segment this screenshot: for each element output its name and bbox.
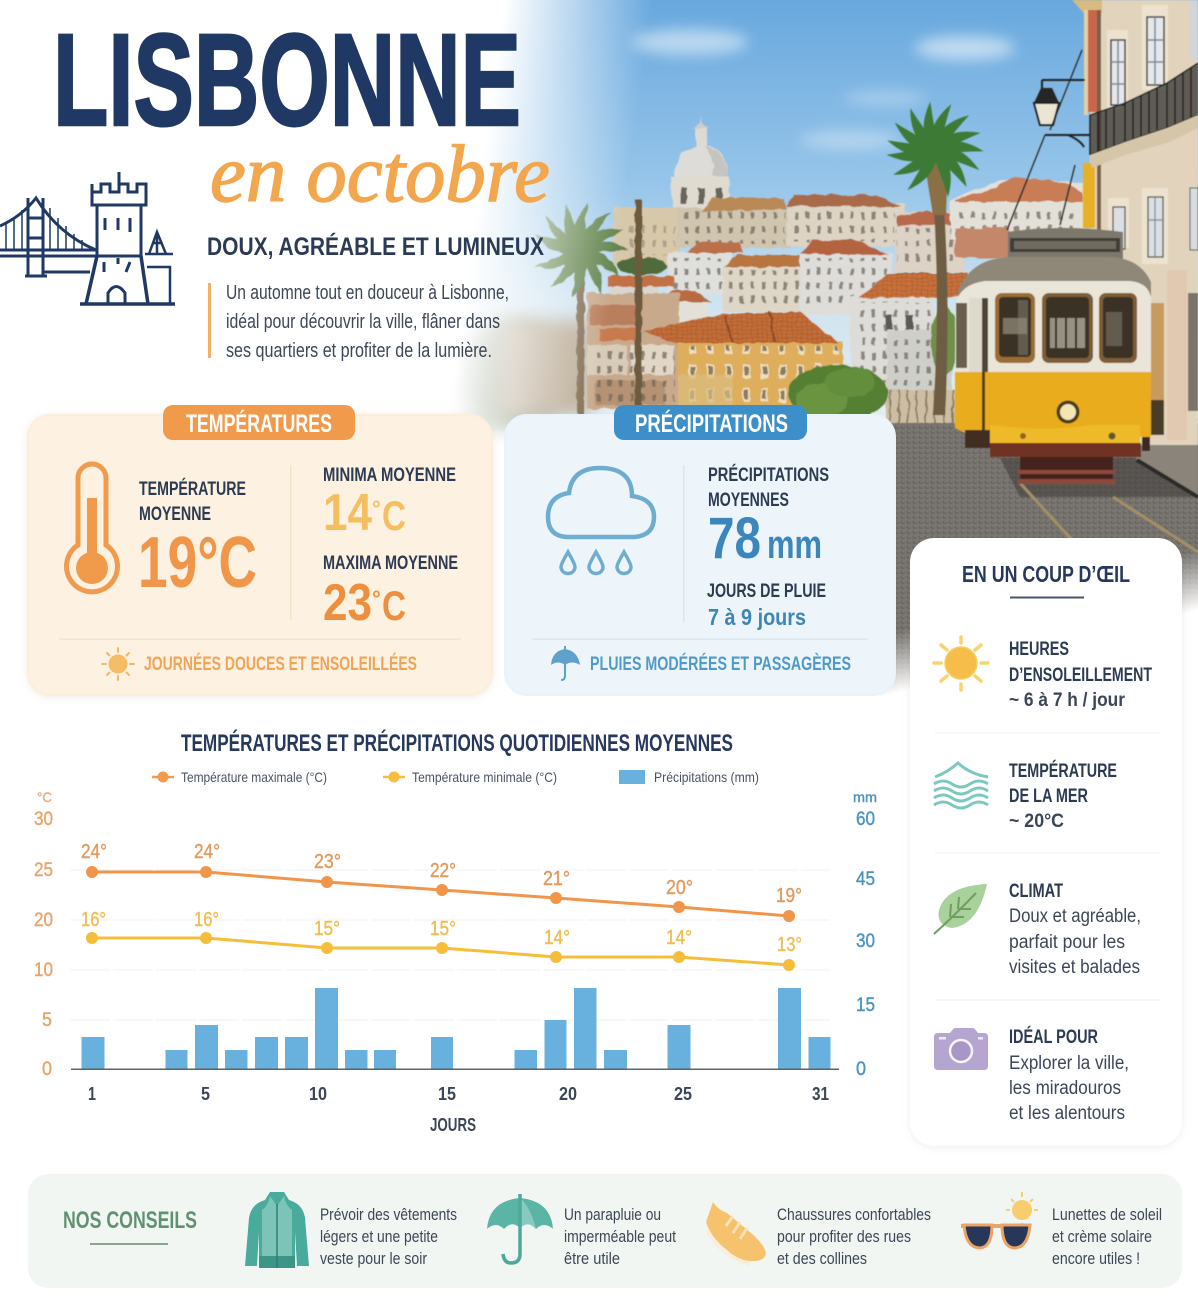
sea temperature: DE LA MER [1009, 786, 1088, 807]
x axis: JOURS [430, 1115, 476, 1135]
sunshine hours [1009, 639, 1152, 711]
badge: precipitation: PRÉCIPITATIONS [635, 409, 788, 438]
average rainfall: MOYENNES [708, 490, 789, 511]
climate [1009, 881, 1141, 978]
value labels: maximum: 24° [81, 841, 107, 863]
panel: tips [28, 1174, 1182, 1288]
subtitle: en octobre: en octobre [210, 128, 550, 219]
value labels: maximum: 19° [776, 885, 802, 907]
value labels: minimum: 14° [544, 927, 570, 949]
tip: sunglasses [1052, 1205, 1162, 1268]
value labels: minimum: 13° [777, 934, 802, 956]
rainy days: 7 à 9 jours [708, 604, 806, 630]
ideal for: les miradouros [1009, 1078, 1121, 1099]
average temperature: TEMPÉRATURE [139, 478, 246, 500]
legend: Précipitations (mm) [654, 769, 759, 785]
minima: MINIMA MOYENNE [323, 465, 456, 486]
minima: 14 [323, 484, 372, 542]
lower left mix [587, 293, 679, 409]
tip: shoes: pour profiter des rues [777, 1227, 911, 1246]
line: maximum temperature [86, 866, 795, 922]
tip: umbrella [564, 1205, 676, 1268]
tip: shoes: Chaussures confortables [777, 1205, 931, 1224]
icon: rain cloud [548, 468, 654, 574]
hero photo: Lisbon street with yellow tram [440, 0, 1198, 723]
sunshine hours: HEURES [1009, 639, 1069, 660]
ideal for: IDÉAL POUR [1009, 1026, 1098, 1048]
tip: clothing [320, 1205, 457, 1268]
right axis: 60 [856, 809, 875, 830]
right axis: 45 [856, 869, 875, 890]
tip: umbrella: être utile [564, 1249, 620, 1268]
climate: visites et balades [1009, 957, 1140, 978]
x axis: 10 [309, 1084, 327, 1104]
climate: CLIMAT [1009, 881, 1063, 902]
left axis: 10 [34, 960, 53, 981]
street lamp [1042, 80, 1090, 147]
title: LISBONNE [53, 6, 521, 153]
maxima: C [382, 582, 406, 629]
x axis [88, 1084, 829, 1135]
climate: Doux et agréable, [1009, 906, 1141, 927]
trees and fence [931, 306, 959, 374]
value labels: minimum: 15° [430, 918, 456, 940]
tip: shoes: et des collines [777, 1249, 867, 1268]
intro paragraph: ses quartiers et profiter de la lumière. [226, 340, 492, 362]
value labels: minimum: 14° [666, 927, 692, 949]
legend: Température minimale (°C) [412, 769, 557, 785]
tip: sunglasses: encore utiles ! [1052, 1249, 1140, 1268]
x axis: 31 [812, 1084, 829, 1104]
tips heading: NOS CONSEILS [63, 1207, 197, 1234]
tip: umbrella: imperméable peut [564, 1227, 676, 1246]
left axis: 20 [34, 910, 53, 931]
tips heading [63, 1207, 197, 1245]
sea temperature [1009, 760, 1117, 832]
chart: daily temperatures and precipitation [34, 729, 877, 1135]
intro paragraph: Un automne tout en douceur à Lisbonne, [226, 282, 509, 304]
average temperature [138, 478, 257, 603]
legend: Température maximale (°C) [181, 769, 327, 785]
left palm [577, 265, 584, 415]
maxima: MAXIMA MOYENNE [323, 553, 458, 574]
icon: small sun [102, 648, 134, 680]
right building [1090, 0, 1198, 445]
tip: umbrella: Un parapluie ou [564, 1205, 661, 1224]
minima: ° [372, 496, 381, 521]
dome [696, 126, 707, 148]
pole [635, 200, 642, 415]
sunshine hours: D’ENSOLEILLEMENT [1009, 665, 1152, 686]
panel: temperatures [28, 405, 492, 695]
left axis [34, 789, 53, 1080]
right axis: mm [853, 789, 877, 805]
right palm [933, 195, 948, 415]
tip: shoes [777, 1205, 931, 1268]
icon: waves [934, 763, 988, 808]
sea temperature: TEMPÉRATURE [1009, 760, 1117, 782]
value labels: minimum [81, 909, 802, 956]
left axis: 0 [42, 1059, 52, 1080]
maxima: 23 [323, 574, 372, 632]
value labels: maximum: 23° [314, 851, 341, 873]
tram [1008, 228, 1123, 262]
value labels: minimum: 15° [314, 918, 340, 940]
value labels: maximum [81, 841, 802, 907]
tip: clothing: Prévoir des vêtements [320, 1205, 457, 1224]
value labels: maximum: 24° [194, 841, 220, 863]
x axis: 15 [438, 1084, 456, 1104]
ideal for: et les alentours [1009, 1103, 1125, 1124]
minima [323, 465, 456, 542]
intro paragraph: idéal pour découvrir la ville, flâner dans [226, 311, 500, 333]
left axis: °C [37, 789, 52, 805]
line: minimum temperature [86, 932, 795, 971]
back hill buildings [613, 207, 679, 267]
intro paragraph [208, 282, 509, 362]
precipitation bars [82, 988, 830, 1069]
tip: sunglasses: et crème solaire [1052, 1227, 1152, 1246]
average temperature: 19°C [138, 523, 257, 603]
icon: umbrella [487, 1194, 553, 1263]
sea temperature: ~ 20°C [1009, 811, 1064, 832]
ideal for: Explorer la ville, [1009, 1053, 1129, 1074]
ground [884, 422, 1198, 694]
value labels: minimum: 16° [194, 909, 219, 931]
tip: sunglasses: Lunettes de soleil [1052, 1205, 1162, 1224]
panel: precipitation [505, 405, 895, 695]
sunshine hours: ~ 6 à 7 h / jour [1009, 690, 1126, 711]
rainy days: JOURS DE PLUIE [707, 581, 826, 602]
badge: temperatures [163, 405, 355, 440]
x axis: 5 [201, 1084, 210, 1104]
maxima [323, 553, 458, 632]
icon: sunglasses and sun [961, 1192, 1038, 1248]
right axis [853, 789, 877, 1080]
icon: bridge and Belem tower [0, 172, 175, 304]
value labels: minimum: 16° [81, 909, 106, 931]
left axis: 25 [34, 860, 53, 881]
icon: camera [934, 1028, 988, 1070]
climate: parfait pour les [1009, 932, 1125, 953]
x axis: 20 [559, 1084, 577, 1104]
icon: shoe [706, 1202, 766, 1264]
caption: PLUIES MODÉRÉES ET PASSAGÈRES [590, 653, 851, 675]
value labels: maximum: 20° [666, 877, 693, 899]
panel: at a glance [910, 538, 1182, 1146]
panel heading: EN UN COUP D’ŒIL [962, 561, 1130, 587]
average rainfall: mm [767, 523, 822, 567]
average rainfall [708, 464, 829, 571]
legend [152, 769, 759, 785]
rainy days [707, 581, 826, 630]
average rainfall: 78 [708, 506, 761, 571]
chart title: TEMPÉRATURES ET PRÉCIPITATIONS QUOTIDIENNES MOYENNES [181, 729, 733, 757]
heading: doux agreable et lumineux: DOUX, AGRÉABLE ET LUMINEUX [207, 232, 544, 261]
middle layer [668, 253, 732, 295]
tip: clothing: veste pour le soir [320, 1249, 427, 1268]
icon: small umbrella [551, 646, 580, 680]
caption: JOURNÉES DOUCES ET ENSOLEILLÉES [144, 653, 417, 675]
icon: leaf [934, 884, 987, 934]
tip: clothing: légers et une petite [320, 1227, 438, 1246]
value labels: maximum: 21° [543, 868, 570, 890]
x axis: 25 [674, 1084, 692, 1104]
maxima: ° [372, 586, 381, 611]
minima: C [382, 492, 406, 539]
badge: temperatures: TEMPÉRATURES [186, 409, 332, 438]
x axis: 1 [88, 1084, 96, 1104]
left axis: 5 [42, 1010, 52, 1031]
badge: precipitation [614, 405, 807, 440]
right axis: 0 [856, 1059, 866, 1080]
icon: sun [934, 637, 988, 690]
value labels: maximum: 22° [430, 860, 456, 882]
left axis: 30 [34, 809, 53, 830]
right axis: 15 [856, 995, 875, 1016]
ideal for [1009, 1026, 1129, 1124]
right axis: 30 [856, 931, 875, 952]
average temperature: MOYENNE [139, 504, 211, 525]
average rainfall: PRÉCIPITATIONS [708, 464, 829, 486]
icon: thermometer [66, 464, 118, 592]
icon: jacket [245, 1192, 309, 1268]
